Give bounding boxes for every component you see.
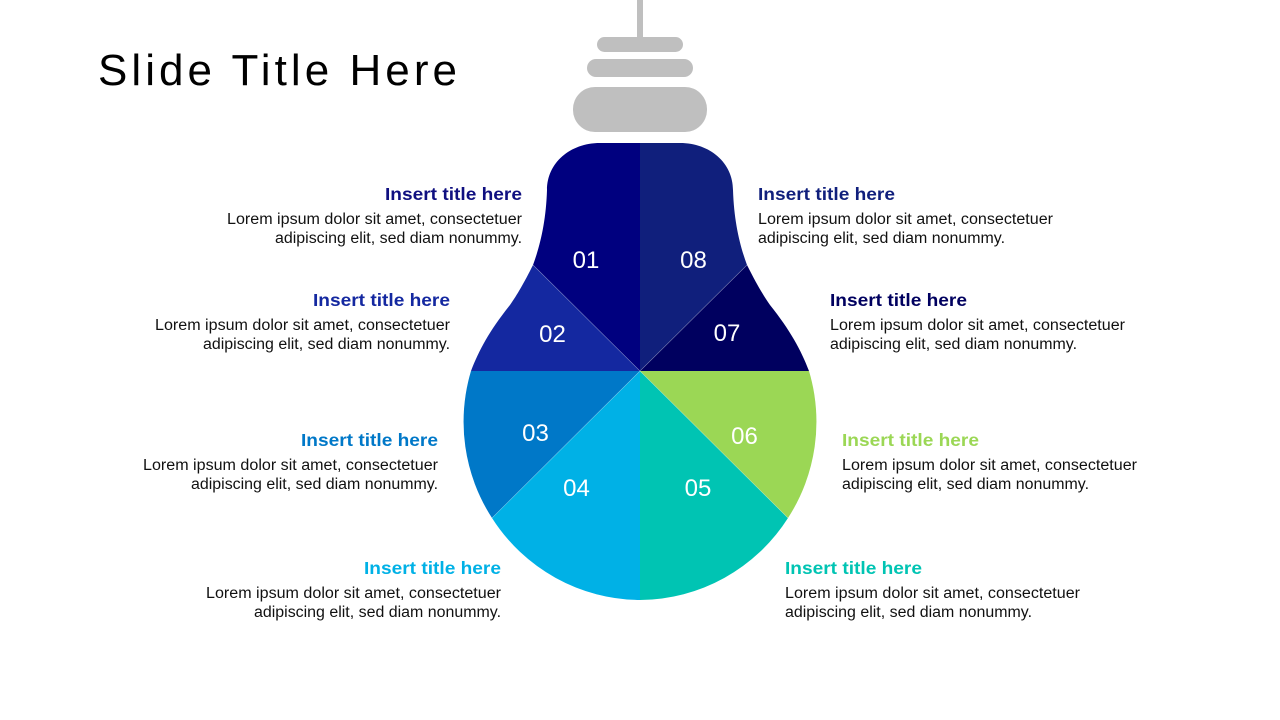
text block 06: Insert title here <box>842 430 979 450</box>
number 01: 01 <box>573 247 599 274</box>
text block 03: adipiscing elit, sed diam nonummy. <box>191 476 438 493</box>
icon: lightbulb cap <box>573 0 707 132</box>
text block 03 <box>143 430 438 493</box>
text block 02 <box>155 290 450 353</box>
text block 07 <box>830 290 1125 353</box>
segment 05 <box>640 371 788 600</box>
text block 07: Insert title here <box>830 290 967 310</box>
number 04: 04 <box>563 475 590 502</box>
segment 04 <box>492 371 640 600</box>
segment 01 <box>533 143 640 371</box>
segment 02 <box>471 265 640 371</box>
text block 02: adipiscing elit, sed diam nonummy. <box>203 336 450 353</box>
number 08: 08 <box>680 247 707 274</box>
title: Slide Title Here <box>98 46 457 95</box>
segment 08 <box>640 143 747 371</box>
text block 05: adipiscing elit, sed diam nonummy. <box>785 604 1032 621</box>
text block 03: Lorem ipsum dolor sit amet, consectetuer <box>143 457 438 474</box>
text block 03: Insert title here <box>301 430 438 450</box>
text block 08: Insert title here <box>758 184 895 204</box>
lightbulb segment chart <box>464 143 816 600</box>
number 03: 03 <box>522 420 549 447</box>
text block 06: Lorem ipsum dolor sit amet, consectetuer <box>842 457 1137 474</box>
text block 01 <box>227 184 522 247</box>
text block 01: Lorem ipsum dolor sit amet, consectetuer <box>227 211 522 228</box>
number 07: 07 <box>714 320 740 347</box>
segment 06 <box>640 371 816 518</box>
segment 03 <box>464 371 640 518</box>
text block 05: Insert title here <box>785 558 922 578</box>
text block 02: Insert title here <box>313 290 450 310</box>
text block 04: Insert title here <box>364 558 501 578</box>
text block 02: Lorem ipsum dolor sit amet, consectetuer <box>155 317 450 334</box>
text block 06 <box>842 430 1137 493</box>
number 06: 06 <box>731 423 758 450</box>
text block 06: adipiscing elit, sed diam nonummy. <box>842 476 1089 493</box>
text block 05: Lorem ipsum dolor sit amet, consectetuer <box>785 585 1080 602</box>
text block 05 <box>785 558 1080 621</box>
text block 04 <box>206 558 501 621</box>
text block 07: Lorem ipsum dolor sit amet, consectetuer <box>830 317 1125 334</box>
text block 01: adipiscing elit, sed diam nonummy. <box>275 230 522 247</box>
text block 08: Lorem ipsum dolor sit amet, consectetuer <box>758 211 1053 228</box>
text block 07: adipiscing elit, sed diam nonummy. <box>830 336 1077 353</box>
number 02: 02 <box>539 321 566 348</box>
segment 07 <box>640 265 809 371</box>
text block 01: Insert title here <box>385 184 522 204</box>
text block 04: adipiscing elit, sed diam nonummy. <box>254 604 501 621</box>
number 05: 05 <box>685 475 711 502</box>
text block 08: adipiscing elit, sed diam nonummy. <box>758 230 1005 247</box>
text block 04: Lorem ipsum dolor sit amet, consectetuer <box>206 585 501 602</box>
text block 08 <box>758 184 1053 247</box>
